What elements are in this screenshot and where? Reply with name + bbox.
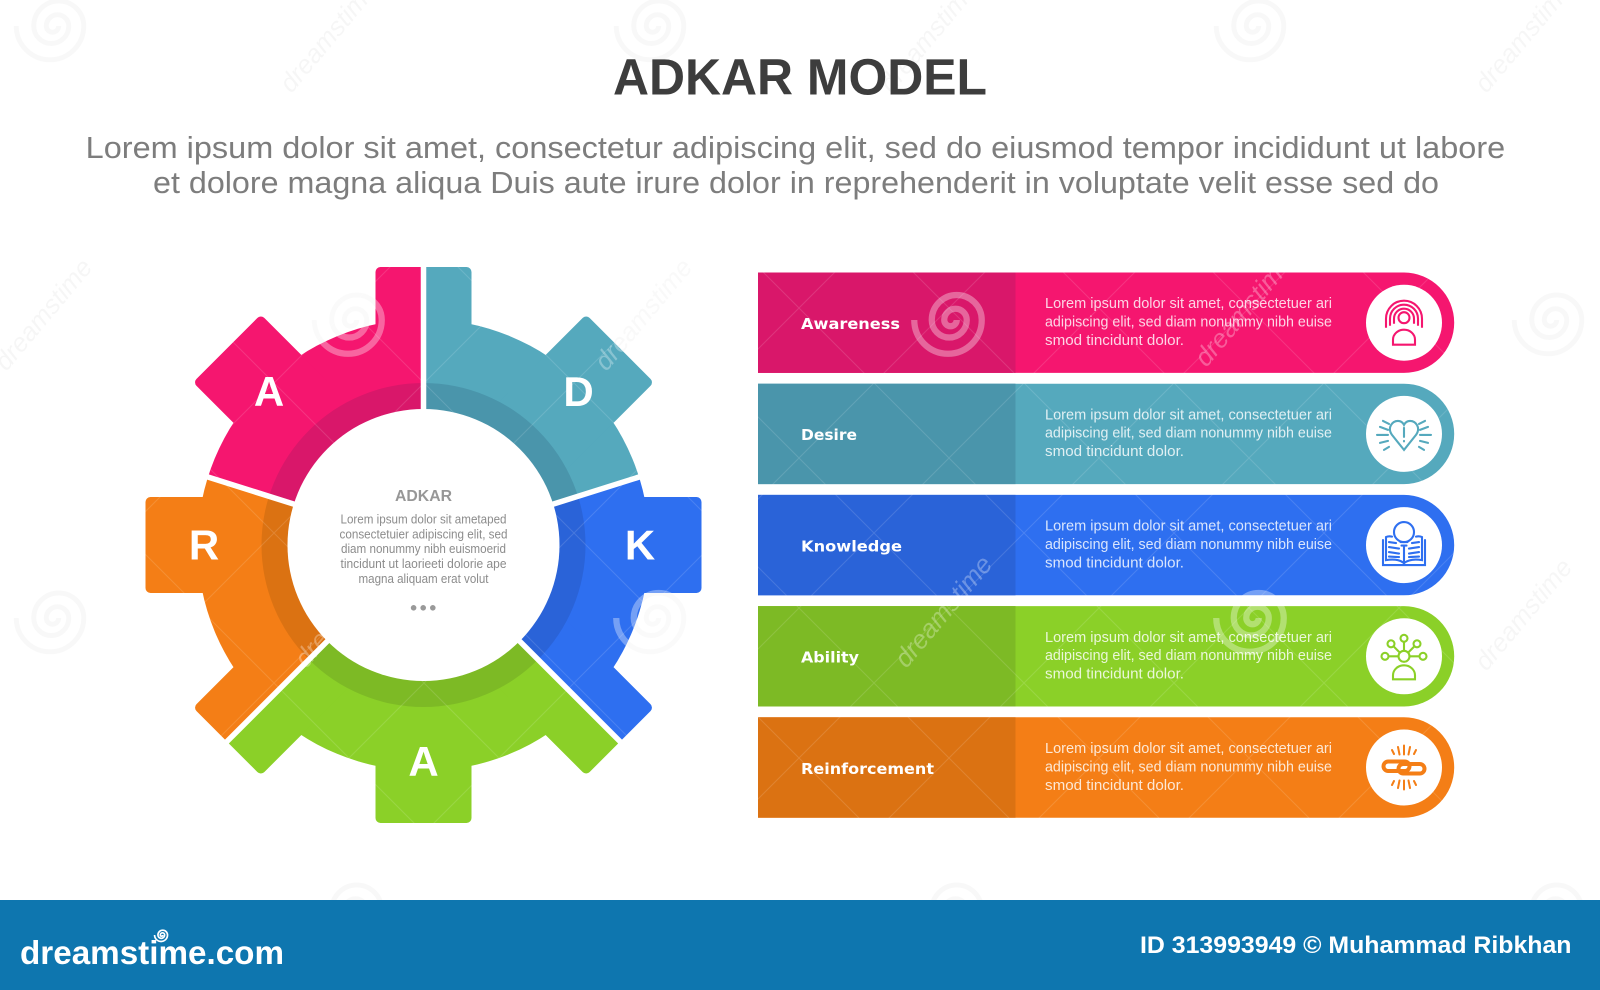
- icon: person with network: [1366, 618, 1442, 694]
- icon: person with signal: [1366, 285, 1442, 361]
- subtitle text: Lorem ipsum dolor sit amet, consectetur adipiscing elit, sed do eiusmod tempor incididunt ut labore: [86, 130, 1505, 165]
- centre dots: [411, 605, 436, 611]
- panel: Awareness: [758, 272, 1454, 373]
- body text: Desire: smod tincidunt dolor.: [1045, 444, 1184, 460]
- footer logo spiral: [155, 930, 168, 941]
- body text: Reinforcement: Lorem ipsum dolor sit amet, consectetuer ari: [1045, 741, 1332, 757]
- subtitle text: et dolore magna aliqua Duis aute irure dolor in reprehenderit in voluptate velit esse sed do: [153, 165, 1439, 200]
- icon: chain link: [1366, 730, 1442, 806]
- label: Knowledge: Knowledge: [801, 537, 902, 555]
- watermark: translucent white marks over coloured shapes: dreamstime: [288, 550, 398, 673]
- footer credit text: ID 313993949 © Muhammad Ribkhan: [1140, 932, 1572, 959]
- body text: Knowledge: adipiscing elit, sed diam nonummy nibh euise: [1045, 537, 1332, 553]
- title: ADKAR MODEL: [613, 48, 987, 106]
- footer logo text: dreamstime.com: [20, 934, 284, 971]
- subtitle text: [86, 130, 1505, 200]
- gear segment: Ability (green): [229, 643, 618, 823]
- body text: Ability: adipiscing elit, sed diam nonummy nibh euise: [1045, 648, 1332, 664]
- centre heading: ADKAR: [395, 488, 452, 505]
- watermark: translucent white marks over coloured shapes: dreamstime: [588, 253, 698, 376]
- panel: Ability: [758, 606, 1454, 706]
- segment letters: D: [563, 368, 594, 415]
- body text: Reinforcement: adipiscing elit, sed diam nonummy nibh euise: [1045, 759, 1332, 775]
- gear segment: Desire (teal): [426, 267, 652, 502]
- body text: Awareness: adipiscing elit, sed diam nonummy nibh euise: [1045, 314, 1332, 330]
- icon: heart with alert: [1366, 396, 1442, 472]
- label: Ability: Ability: [801, 649, 859, 667]
- body text: Awareness: Lorem ipsum dolor sit amet, consectetuer ari: [1045, 296, 1332, 312]
- centre text block: magna aliquam erat volut: [358, 572, 489, 586]
- gear segment: Reinforcement (orange): [146, 480, 326, 740]
- centre text block: consectetuier adipiscing elit, sed: [340, 527, 508, 541]
- body text: Awareness: [1045, 296, 1332, 349]
- segment letters: A: [408, 738, 439, 785]
- footer bar: [0, 900, 1600, 990]
- centre text block: diam nonummy nibh euismoerid: [341, 542, 506, 556]
- body text: Knowledge: smod tincidunt dolor.: [1045, 555, 1184, 571]
- label: Reinforcement: Reinforcement: [801, 760, 935, 778]
- body text: Ability: [1045, 630, 1332, 683]
- body text: Ability: smod tincidunt dolor.: [1045, 667, 1184, 683]
- icon: book with light bulb: [1366, 507, 1442, 583]
- gear segment: Knowledge (blue): [522, 480, 702, 740]
- gear diagram: [137, 245, 710, 823]
- segment letters: R: [189, 522, 219, 568]
- watermark lattice lines over coloured shapes: [140, 260, 1470, 830]
- centre text block: Lorem ipsum dolor sit ametaped: [340, 512, 507, 526]
- body text: Desire: [1045, 407, 1332, 460]
- body text: Knowledge: [1045, 519, 1332, 571]
- centre text block: tincidunt ut laorieeti dolorie ape: [340, 557, 507, 571]
- panel: Knowledge: [758, 495, 1454, 595]
- label: Desire: Desire: [801, 426, 857, 444]
- body text: Desire: Lorem ipsum dolor sit amet, consectetuer ari: [1045, 407, 1332, 423]
- watermark: translucent white marks over coloured shapes: [288, 249, 1298, 673]
- watermark: faint grey marks on white: dreamstime: [1468, 553, 1578, 676]
- centre text block: [340, 512, 508, 586]
- segment letters: [189, 368, 655, 785]
- body text: Awareness: smod tincidunt dolor.: [1045, 333, 1184, 349]
- body text: Reinforcement: [1045, 741, 1332, 794]
- body text: Ability: Lorem ipsum dolor sit amet, consectetuer ari: [1045, 630, 1332, 646]
- body text: Reinforcement: smod tincidunt dolor.: [1045, 778, 1184, 794]
- segment letters: K: [625, 522, 655, 568]
- watermark: faint grey marks on white: dreamstime: [588, 253, 698, 376]
- watermark: translucent white marks over coloured shapes: dreamstime: [888, 550, 998, 673]
- label: Awareness: Awareness: [801, 315, 900, 333]
- body text: Desire: adipiscing elit, sed diam nonummy nibh euise: [1045, 426, 1332, 442]
- gear segment: Awareness (pink): [195, 267, 421, 502]
- body text: Knowledge: Lorem ipsum dolor sit amet, consectetuer ari: [1045, 519, 1332, 535]
- centre white circle: [288, 409, 560, 681]
- watermark: translucent white marks over coloured shapes: dreamstime: [1188, 249, 1298, 372]
- segment letters: A: [254, 368, 284, 415]
- panel: Reinforcement: [758, 717, 1454, 818]
- panel: Desire: [758, 384, 1454, 484]
